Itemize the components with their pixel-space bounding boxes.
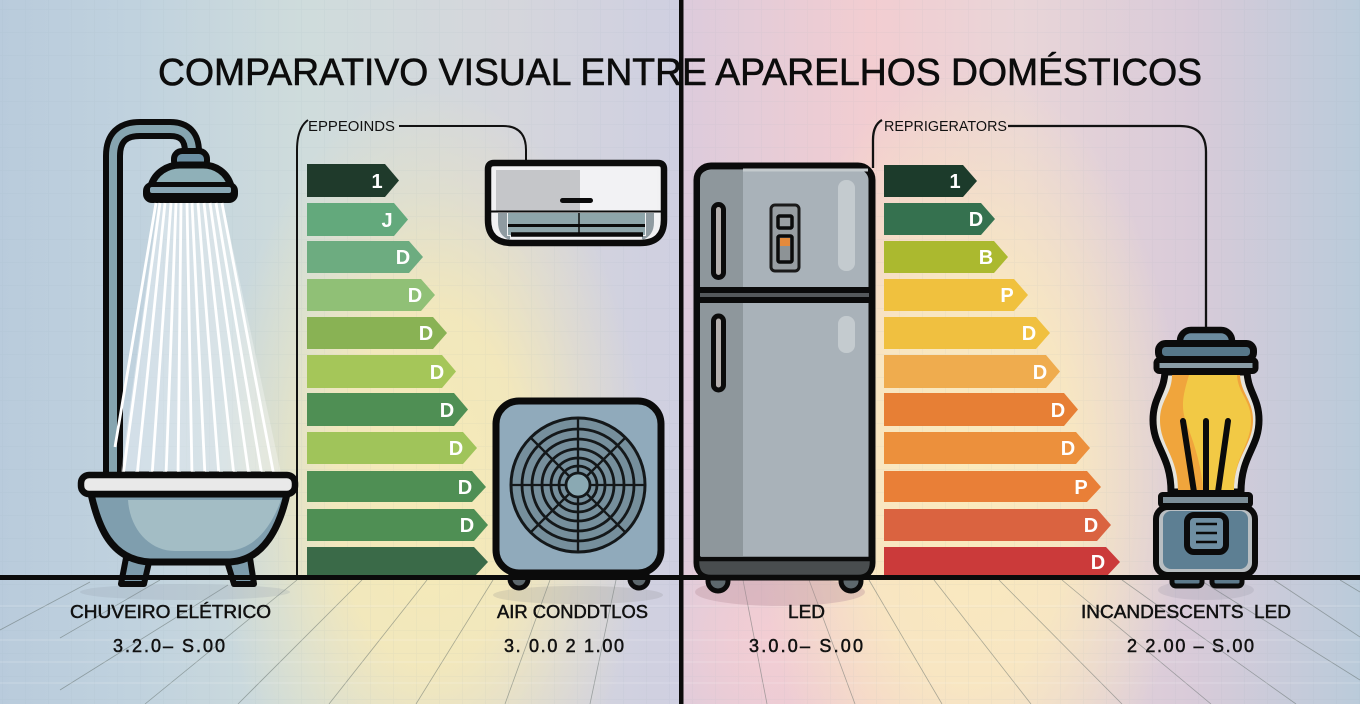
- bar J: D: [460, 515, 474, 537]
- shower: [80, 129, 295, 600]
- floor line: [0, 575, 1360, 580]
- bar B: [307, 203, 408, 236]
- bar K: D: [1091, 552, 1105, 574]
- water jets: [115, 203, 282, 478]
- caption: refrigerator: LED: [788, 602, 825, 622]
- caption: refrigerator: [749, 602, 863, 656]
- highlights: [838, 180, 855, 353]
- bar G: D: [1051, 400, 1065, 422]
- bar J: [884, 509, 1111, 541]
- caption: shower: [70, 602, 271, 656]
- air conditioner indoor unit: [488, 163, 664, 243]
- bar A: [307, 164, 399, 197]
- bar H: [884, 432, 1090, 464]
- caption: air conditioner: 3. 0.0 2 1.00: [504, 636, 624, 656]
- floor tiles: [0, 580, 1360, 704]
- bar K: [884, 547, 1120, 577]
- bar E: D: [419, 323, 433, 345]
- bar G: [884, 393, 1078, 426]
- bar F: D: [1033, 362, 1047, 384]
- bar I: D: [458, 477, 472, 499]
- glass body: [1153, 372, 1259, 492]
- caption: bulb: 2 2.00 – S.00: [1127, 636, 1254, 656]
- refrigerator: [695, 166, 872, 606]
- bar A: 1: [371, 171, 383, 193]
- freezer divider: [697, 287, 872, 303]
- bar H: D: [449, 438, 463, 460]
- bar D: P: [1000, 285, 1014, 307]
- bar B: D: [969, 209, 983, 231]
- bar D: [884, 279, 1028, 311]
- bar E: [307, 317, 447, 349]
- connector: left energy label bracket: [297, 120, 526, 575]
- label: EPPEOINDS: EPPEOINDS: [308, 118, 395, 135]
- label: REPRIGERATORS: REPRIGERATORS: [884, 118, 1007, 135]
- caption: bulb: [1081, 602, 1291, 656]
- bar E: [884, 317, 1050, 349]
- bar B: J: [381, 210, 393, 232]
- bar G: [307, 393, 468, 426]
- filaments: [1183, 421, 1228, 492]
- caption: air conditioner: [497, 602, 648, 656]
- bar I: P: [1074, 477, 1088, 499]
- fan grille: [511, 418, 645, 552]
- caption: air conditioner: AIR CONDDTLOS: [497, 602, 648, 622]
- title: COMPARATIVO VISUAL ENTRE APARELHOS DOMÉSTICOS: [158, 51, 1202, 94]
- energy rating chart: left: [307, 164, 488, 577]
- bar J: [307, 509, 488, 541]
- caption: bulb: INCANDESCENTS LED: [1081, 602, 1291, 622]
- center divider: [679, 0, 684, 704]
- bar D: D: [408, 285, 422, 307]
- bar G: D: [440, 400, 454, 422]
- bar A: [884, 165, 977, 197]
- bar J: D: [1084, 515, 1098, 537]
- bar E: D: [1022, 323, 1036, 345]
- control panel: [771, 205, 799, 271]
- caption: refrigerator: 3.0.0– S.00: [749, 636, 863, 656]
- bar I: [884, 471, 1101, 502]
- bar C: B: [979, 247, 993, 269]
- bathtub: [80, 473, 295, 600]
- bar K: [307, 547, 488, 577]
- bar F: [307, 355, 456, 388]
- caption: shower: 3.2.0– S.00: [113, 636, 225, 656]
- shower pipe: [113, 129, 192, 480]
- bar C: [884, 241, 1008, 273]
- bar C: D: [396, 247, 410, 269]
- bar C: [307, 241, 423, 273]
- incandescent bulb lamp: [1153, 330, 1259, 600]
- energy rating chart: right: [884, 165, 1120, 577]
- bar D: [307, 279, 435, 311]
- bar I: [307, 471, 486, 502]
- caption: shower: CHUVEIRO ELÉTRICO: [70, 602, 271, 622]
- bar H: [307, 432, 477, 464]
- fridge base: [697, 559, 872, 577]
- shower head: [143, 151, 238, 203]
- bar H: D: [1061, 438, 1075, 460]
- air conditioner outdoor unit: [493, 401, 663, 604]
- door handles: [714, 204, 724, 390]
- louvers: [498, 213, 654, 240]
- lamp base: [1156, 494, 1255, 586]
- bar A: 1: [949, 171, 961, 193]
- lamp cap: [1156, 330, 1256, 371]
- connector: right energy label bracket: [873, 120, 1206, 332]
- bar B: [884, 203, 995, 235]
- bar F: D: [430, 362, 444, 384]
- bar F: [884, 355, 1060, 388]
